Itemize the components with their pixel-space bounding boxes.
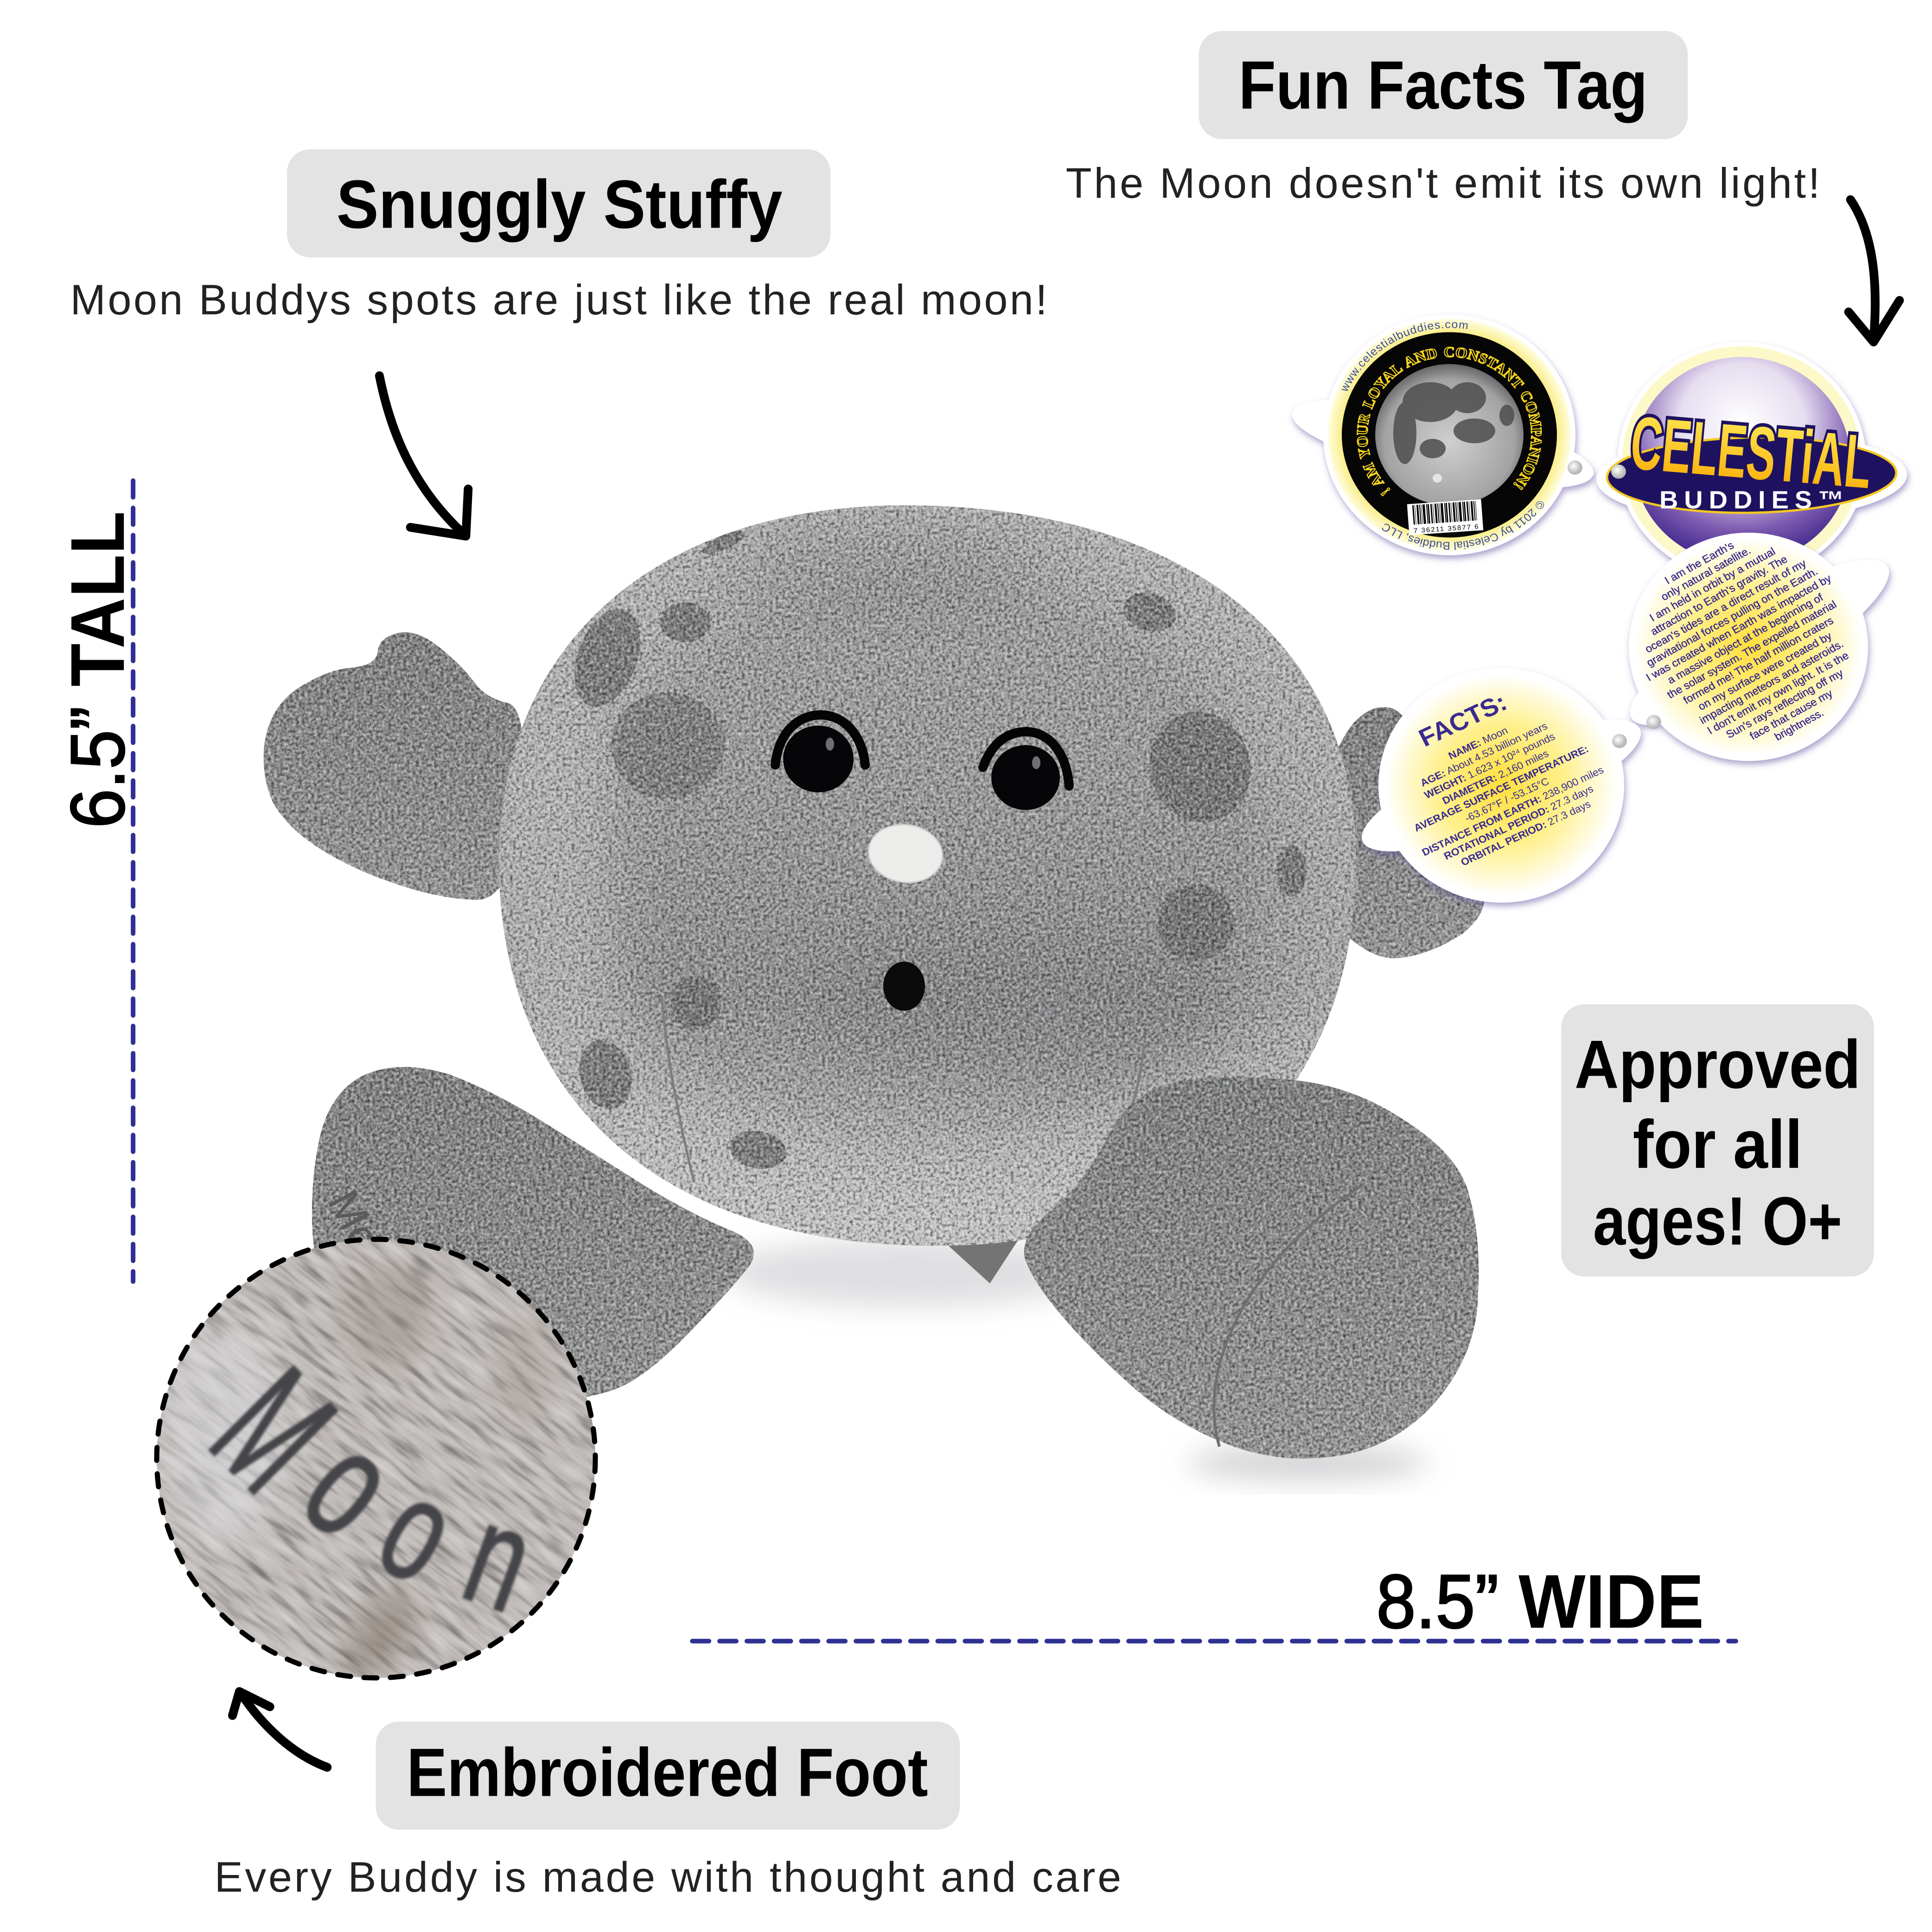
facts list: WEIGHT: 1.623 x 10²⁴ pounds [1422, 731, 1557, 801]
black ring [1342, 332, 1557, 537]
story paragraph: Sun's rays reflecting off my [1724, 667, 1845, 740]
embroidered word: o [355, 1448, 482, 1614]
caption: embroidered foot: Every Buddy is made with thought and care [215, 1854, 1121, 1901]
plush fabric tail between legs [940, 1238, 1020, 1283]
grommet: story tag [1646, 715, 1661, 729]
tag die-cut shape [1285, 314, 1600, 555]
facts list: ROTATIONAL PERIOD: 27.3 days [1442, 783, 1595, 862]
callout pill: approved for all ages: ages! O+ [1593, 1183, 1842, 1259]
right leg [1024, 1078, 1479, 1459]
left arm [264, 632, 523, 900]
facts list: -63.67°F / -53.15°C [1463, 776, 1551, 824]
embroidered word: n [446, 1473, 553, 1643]
logo halo [1622, 346, 1862, 575]
dashed outline [157, 1239, 595, 1678]
tag: moon photo [1285, 314, 1600, 555]
heading pill: embroidered foot [376, 1722, 960, 1830]
moon photograph [1375, 364, 1524, 506]
callout: embroidered foot close-up [0, 983, 877, 1932]
tag: celestial buddies logo [1595, 342, 1908, 579]
story paragraph: impacting meteors and asteroids. [1697, 638, 1845, 726]
nose [865, 820, 946, 887]
moon plush toy [264, 505, 1484, 1459]
story paragraph: attraction to Earth's gravity. The [1648, 553, 1789, 638]
story die-cut shape [1611, 533, 1908, 761]
story paragraph: formed me! The half million craters [1681, 614, 1836, 706]
caption: snuggly stuffy: Moon Buddys spots are just like the real moon! [70, 276, 1047, 324]
website text: www.celestialbuddies.com [1338, 319, 1469, 394]
story paragraph: ocean's tides are a direct result of my [1643, 557, 1808, 655]
grommet: moon tag [1568, 460, 1582, 475]
furry arms [264, 632, 1484, 958]
caption: fun facts: The Moon doesn't emit its own light! [1066, 160, 1820, 207]
story yellow glow [1635, 538, 1862, 755]
story paragraph: brightness. [1773, 707, 1826, 743]
logo word: buddies: BUDDIES™ [1659, 486, 1844, 514]
callout pill: approved for all ages: for all [1633, 1106, 1803, 1183]
foot seam [1214, 1185, 1363, 1447]
yellow rim [1328, 319, 1571, 551]
body soft shading [519, 529, 1243, 1099]
body seams [662, 996, 1144, 1182]
facts list: DISTANCE FROM EARTH: 238,900 miles [1420, 764, 1606, 858]
logo die-cut shape [1595, 342, 1908, 579]
logo sphere [1633, 357, 1850, 564]
right arm [1307, 707, 1484, 958]
facts die-cut shape [1347, 668, 1655, 903]
barcode [1407, 499, 1483, 535]
width dimension line [692, 1639, 1736, 1644]
story paragraph: I am the Earth's [1663, 539, 1736, 587]
callout pill: approved for all ages: Approved [1575, 1026, 1861, 1103]
body edge highlight [499, 505, 1356, 1246]
heading pill: fun facts tag [1199, 31, 1688, 139]
grommet: logo tag [1611, 465, 1626, 478]
story paragraph: only natural satellite. [1659, 544, 1753, 603]
story paragraph: face that cause my [1747, 687, 1835, 742]
barcode: 7 36211 35877 6 [1413, 523, 1479, 535]
story paragraph: I am held in orbit by a mutual [1647, 545, 1777, 624]
facts list: ORBITAL PERIOD: 27.3 days [1459, 798, 1593, 868]
tag: facts [1347, 668, 1655, 903]
body sphere [499, 505, 1356, 1246]
story paragraph: the solar system. The expelled material [1665, 598, 1838, 701]
close-up fabric [0, 983, 877, 1932]
story paragraph: gravitational forces pulling on the Earth. [1645, 565, 1820, 669]
ring lettering: ! AM YOUR LOYAL AND CONSTANT COMPANION! [1353, 344, 1545, 499]
craters [562, 526, 1307, 1173]
embroidered word: o [274, 1401, 428, 1569]
copyright text: © 2011 by Celestial Buddies, LLC [1379, 498, 1547, 552]
grommet: facts tag [1612, 734, 1627, 748]
facts list: DIAMETER: 2,160 miles [1441, 748, 1550, 807]
arrow: to embroidered foot [232, 1691, 327, 1767]
tag: story text [1605, 506, 1908, 781]
facts list: AVERAGE SURFACE TEMPERATURE: [1412, 743, 1590, 834]
heading pill: snuggly stuffy [287, 149, 830, 257]
shadow under right foot [1187, 1445, 1428, 1480]
facts yellow glow [1385, 675, 1617, 896]
embroidered word: M [178, 1335, 369, 1526]
logo ring band [1607, 435, 1897, 515]
embroidered word [178, 1335, 553, 1643]
arrow: to plush [379, 376, 468, 536]
left eye [775, 715, 865, 792]
width label: 8.5” WIDE [1376, 1559, 1704, 1644]
facts list: NAME: Moon [1447, 725, 1510, 762]
left leg [312, 1067, 754, 1419]
mouth [883, 962, 925, 1011]
arrow: to tags [1849, 200, 1900, 342]
embroidered name on left leg: Moon [318, 1182, 414, 1303]
callout pill: approved for all ages [1561, 1004, 1874, 1276]
facts heading: FACTS: [1414, 688, 1511, 752]
heading pill: snuggly stuffy: Snuggly Stuffy [337, 166, 783, 242]
shadow under plush body [723, 1238, 1094, 1307]
story paragraph: on my surface were created by [1696, 630, 1834, 713]
right eye [983, 732, 1069, 810]
story paragraph: I was created when Earth was impacted by [1644, 572, 1833, 683]
heading pill: embroidered foot: Embroidered Foot [407, 1734, 928, 1811]
story paragraph: I don't emit my own light. It is the [1705, 650, 1851, 736]
plush body with craters [499, 505, 1356, 1246]
height label: 6.5” TALL [55, 511, 140, 828]
fun facts tags [1285, 314, 1908, 903]
height dimension line [131, 481, 135, 1282]
heading pill: fun facts tag: Fun Facts Tag [1238, 47, 1648, 123]
facts list: AGE: About 4.53 billion years [1418, 720, 1549, 789]
story paragraph: a massive object at the beginning of [1665, 591, 1825, 686]
